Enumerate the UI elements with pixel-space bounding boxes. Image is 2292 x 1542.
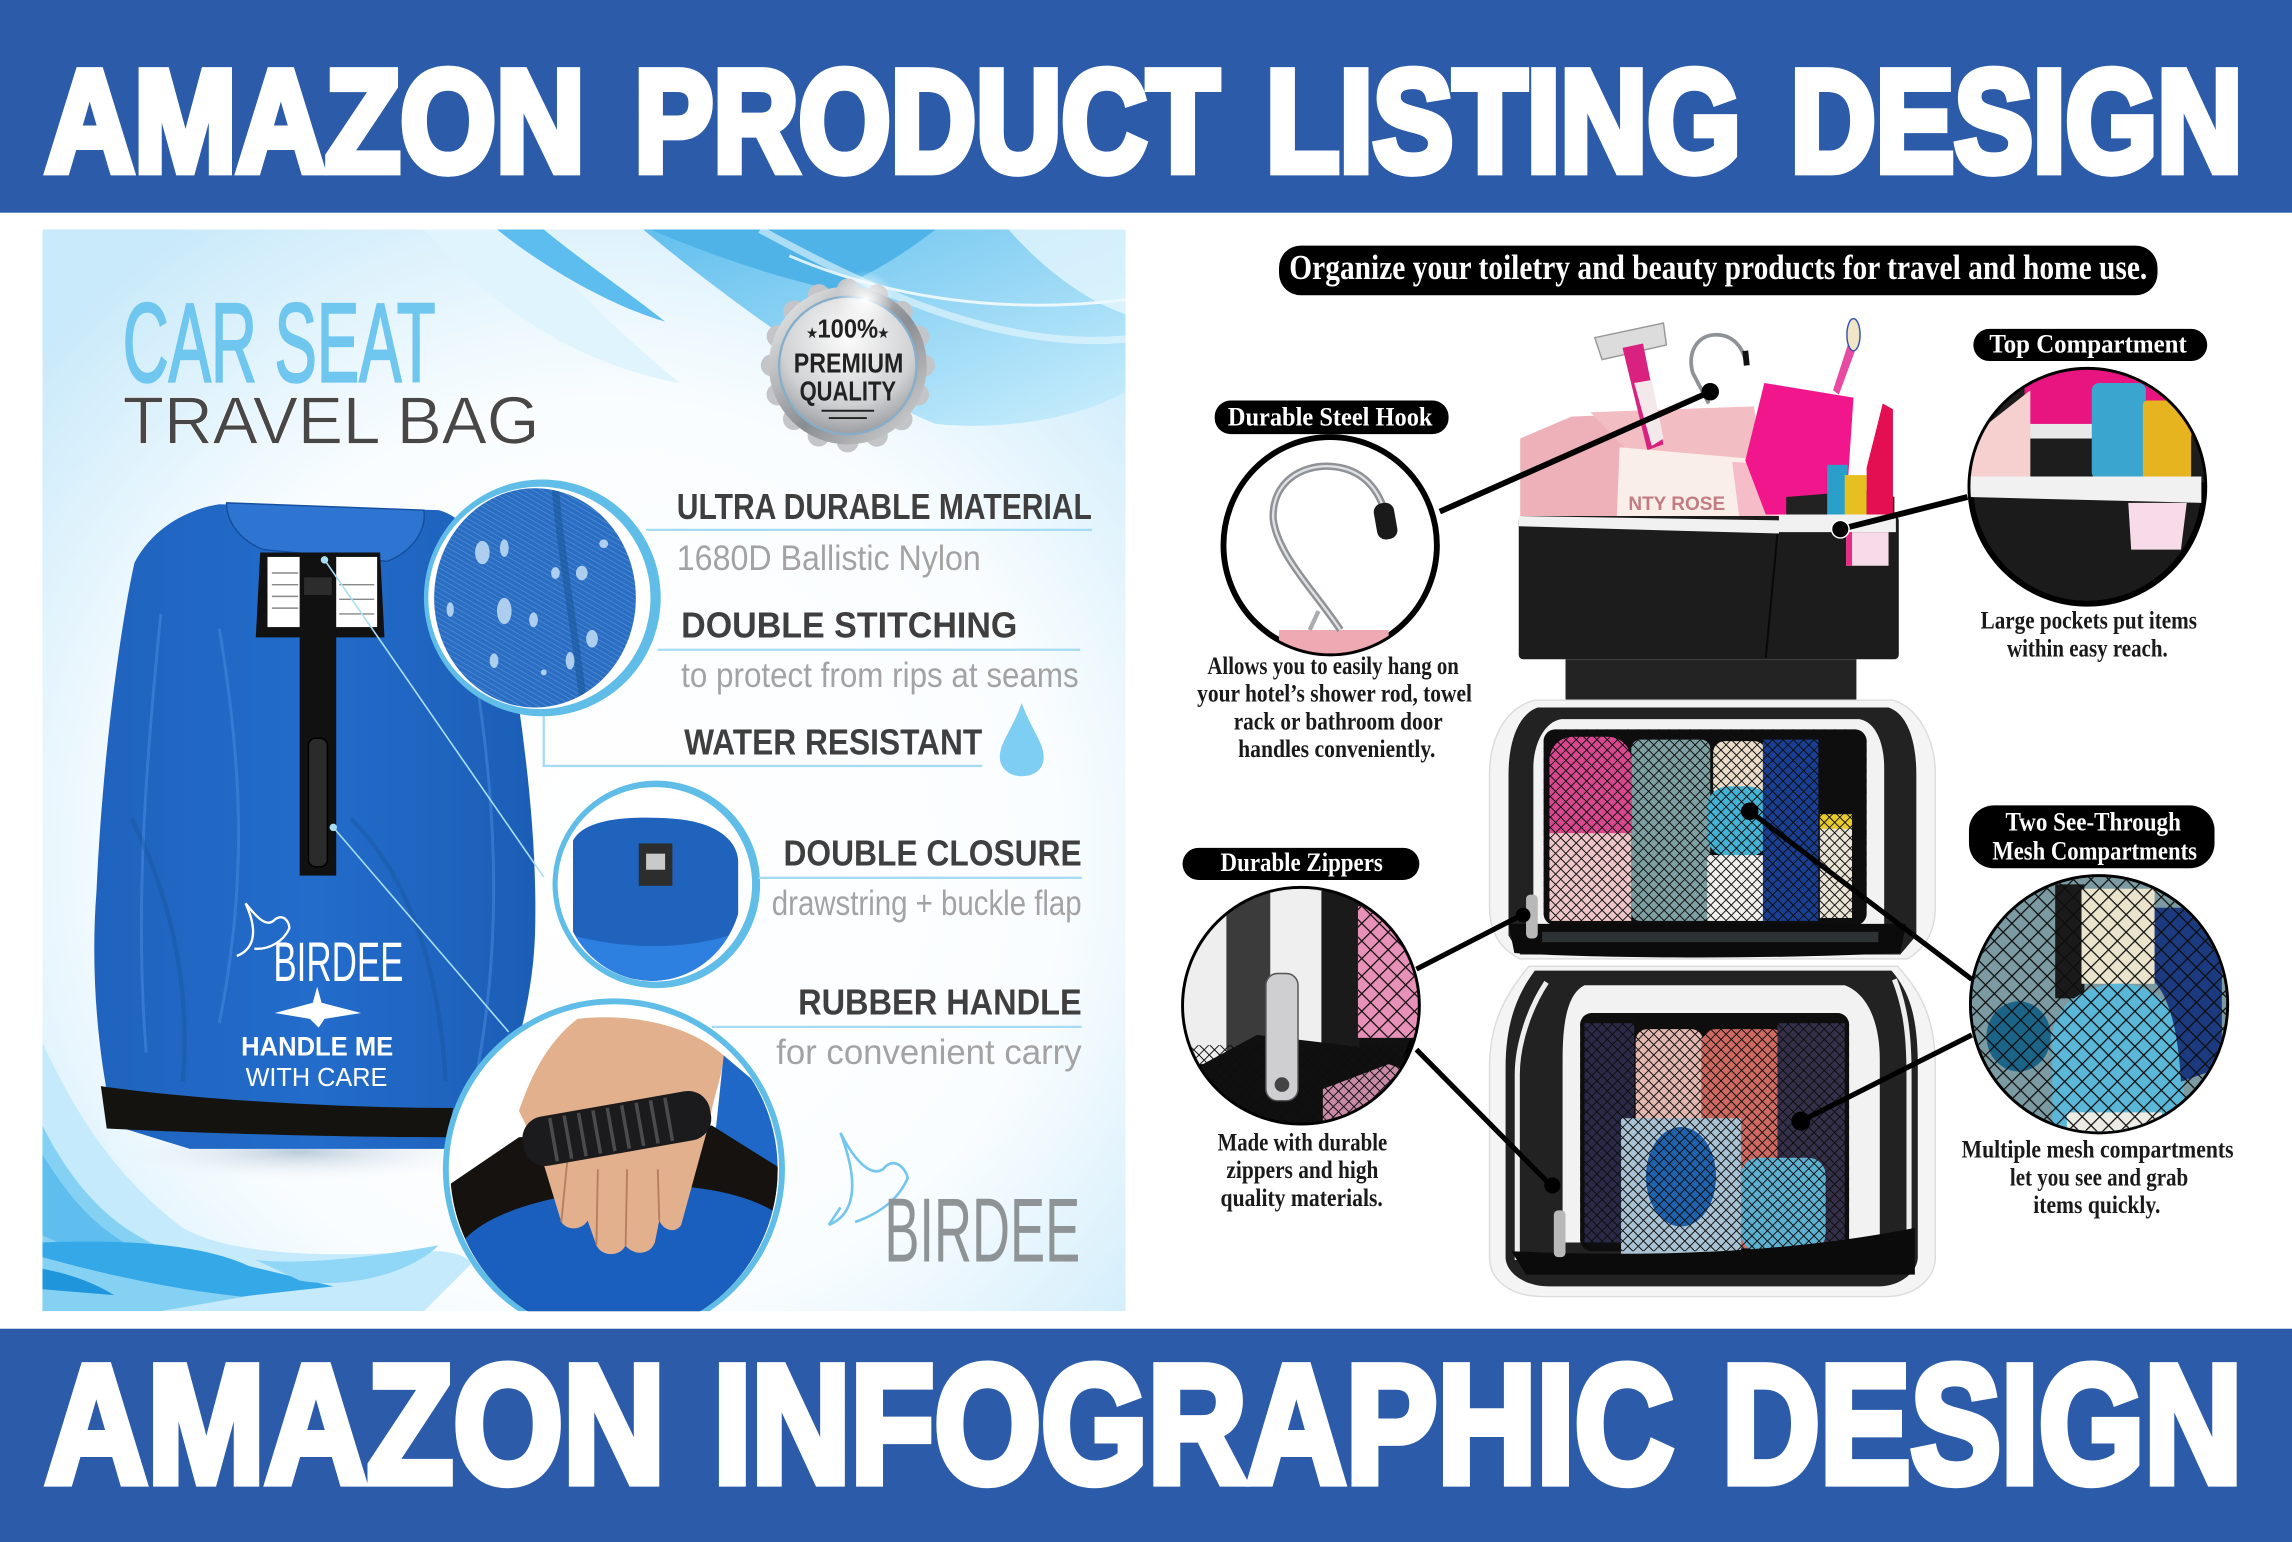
bottom banner title: AMAZON [45,1330,665,1518]
top swooshes [424,230,1126,426]
badge: premium quality: PREMIUM [794,348,903,379]
hook caption: your hotel’s shower rod, towel [1197,681,1472,708]
pocket detail circle [1832,365,2209,604]
luggage tag [256,553,384,637]
hook caption: Allows you to easily hang on [1207,653,1459,680]
top banner [0,0,2292,213]
rubber grip [308,738,327,867]
mesh caption [1962,1137,2234,1219]
rubber handle grip [522,1091,712,1166]
feature: double closure: DOUBLE CLOSURE [783,832,1082,873]
callout: mesh compartments [1741,803,2234,1219]
detail circle: rubber handle [443,998,789,1340]
brand logo: birdee [828,1132,1078,1262]
bag text: with care: WITH CARE [246,1062,387,1092]
feature: ultra durable material [646,486,1092,578]
callout: durable zippers [1183,848,1560,1212]
feature: water resistant: WATER RESISTANT [684,721,982,762]
mesh caption: let you see and grab [2010,1164,2188,1191]
badge: premium quality [769,270,927,444]
feature: double closure [759,832,1082,923]
hand [519,1017,724,1254]
top banner title: LISTING [1266,40,1741,202]
top compartment pouch [1519,515,1899,659]
zipper caption: Made with durable [1218,1129,1387,1156]
feature: ultra durable material: ULTRA DURABLE MATERIAL [677,486,1092,527]
headline pill [1279,246,2158,295]
feature: rubber handle: RUBBER HANDLE [798,981,1082,1022]
top banner title: AMAZON [45,40,585,202]
bottom banner title [45,1330,2242,1518]
mesh caption: Multiple mesh compartments [1962,1137,2234,1164]
bag logo: bird [237,903,289,956]
zipper caption [1218,1129,1387,1212]
feature: water resistant [544,716,982,766]
mesh caption: items quickly. [2033,1192,2160,1219]
pill label: Two See-Through [2006,807,2181,836]
top compartment contents: NTY ROSE [1628,494,1725,515]
feature: double stitching [658,604,1080,695]
pill label: Top Compartment [1989,329,2187,358]
feature: double closure: drawstring + buckle flap [772,884,1082,923]
product: blue travel bag [94,503,535,1149]
bottom banner [0,1329,2292,1542]
bottom left swooshes [42,1042,471,1311]
icon: water drop [1000,703,1044,776]
connector lines [322,557,544,1032]
hook caption: handles conveniently. [1238,736,1435,763]
callout: top compartment [1832,329,2209,662]
hook caption: rack or bathroom door [1234,708,1443,735]
hook detail circle [1223,383,1719,659]
top compartment caption [1981,608,2197,662]
black strap [300,555,336,876]
feature: ultra durable material: 1680D Ballistic Nylon [677,539,981,578]
zipper detail circle [1184,889,1560,1194]
heading: car seat: CAR SEAT [123,280,436,406]
zipper caption: zippers and high [1226,1157,1379,1184]
detail circle: ballistic nylon [424,479,661,716]
callout: durable steel hook [1197,383,1719,763]
badge: premium quality: QUALITY [800,376,896,407]
product: hanging toiletry bag [1490,319,1935,1297]
bag logo: birdee: BIRDEE [273,931,403,993]
pill label: Durable Zippers [1221,848,1383,877]
connecting fabric [1566,659,1856,718]
top banner title [45,40,2242,202]
heading: travel bag: TRAVEL BAG [123,384,539,459]
panel: car seat travel bag listing [42,230,1126,1340]
mesh detail circle [1741,803,2228,1133]
brand logo: birdee: BIRDEE [884,1180,1080,1281]
zipper caption: quality materials. [1221,1185,1383,1212]
water droplets [447,539,608,675]
pill label: Durable Steel Hook [1228,402,1433,431]
bottom black band [101,1086,453,1137]
top banner title: PRODUCT [634,40,1219,202]
top compartment caption: within easy reach. [2007,635,2168,662]
lower compartment [1490,966,1935,1297]
bottom banner title: INFOGRAPHIC [713,1330,1674,1518]
headline pill: Organize your toiletry and beauty products for travel and home use. [1289,248,2147,287]
bag floor shadow [185,1148,424,1172]
middle compartment [1490,700,1935,959]
hook caption [1197,653,1472,763]
detail circle: double closure [553,781,760,994]
feature: double stitching: DOUBLE STITCHING [681,604,1017,645]
badge: premium quality: ★100%★ [807,314,889,344]
top compartment caption: Large pockets put items [1981,608,2197,635]
icon: airplane [275,987,361,1028]
top compartment contents [1520,319,1894,522]
pill label: Mesh Compartments [1992,837,2197,866]
feature: rubber handle: for convenient carry [776,1033,1082,1072]
feature: rubber handle [712,981,1082,1072]
feature: double stitching: to protect from rips at seams [681,656,1079,695]
pill label [1969,805,2215,868]
panel: toiletry organizer [1183,246,2234,1297]
bag text: handle me: HANDLE ME [241,1031,393,1061]
